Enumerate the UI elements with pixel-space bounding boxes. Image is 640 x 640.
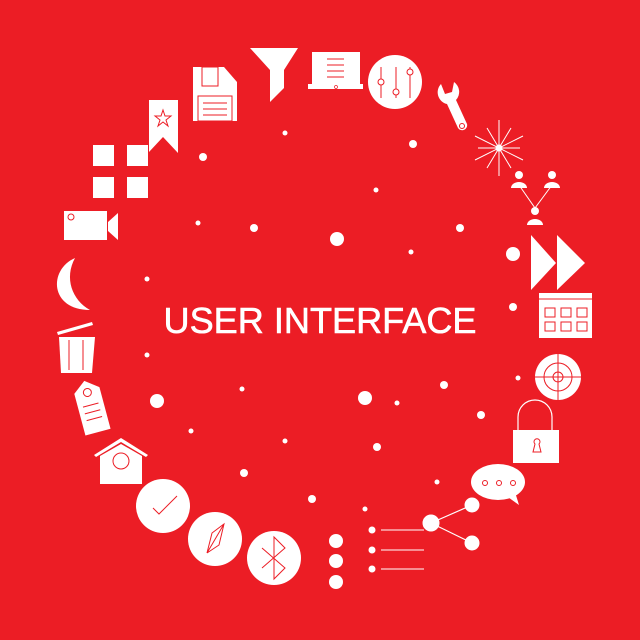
icon: bluetooth	[247, 531, 301, 585]
icon: share	[423, 498, 479, 550]
icon: wrench	[438, 82, 467, 130]
icon: sliders	[368, 55, 422, 109]
icon: laptop	[308, 52, 363, 89]
icon: house	[94, 438, 148, 484]
icon: sparkle	[475, 120, 523, 176]
icon: compass	[188, 512, 242, 566]
icon: bookmark and grid	[93, 100, 178, 198]
icon: check circle	[136, 479, 190, 533]
icon: calendar	[539, 293, 592, 338]
icon: target	[535, 354, 581, 400]
icon: fast forward	[531, 235, 585, 290]
icon: video camera	[64, 211, 118, 240]
icon: tag	[72, 378, 111, 435]
icon: funnel	[250, 48, 298, 102]
icon: people network	[511, 171, 560, 225]
icon: floppy	[193, 67, 237, 121]
icon: moon	[57, 258, 90, 310]
icon: three dots	[329, 534, 343, 589]
icon: lock	[513, 400, 559, 463]
icon: trash	[57, 322, 95, 373]
icon: chat bubble	[471, 464, 525, 505]
icon: list	[368, 526, 424, 572]
title: USER INTERFACE	[164, 300, 476, 341]
